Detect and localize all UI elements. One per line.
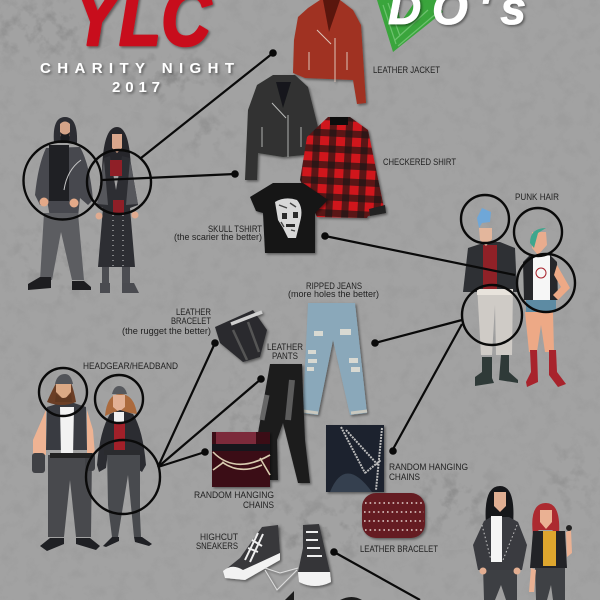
label: ripped jeans: RIPPED JEANS (306, 281, 362, 291)
subtitle: charity night: CHARITY NIGHT (40, 60, 234, 77)
item: black leather jacket (245, 75, 318, 180)
connector end dots (201, 49, 397, 556)
item: red leather jacket (293, 0, 366, 104)
item: jeans with chain (326, 425, 384, 492)
label: skull tshirt: SKULL TSHIRT (208, 224, 262, 234)
subtitle: year: 2017 (112, 79, 160, 96)
label: skull tshirt note: (the scarier the better) (174, 232, 262, 242)
item: ripped jeans (302, 303, 367, 415)
label: leather bracelet line 1: LEATHER (176, 307, 211, 317)
item: skull t-shirt (250, 183, 328, 253)
highlight circles (24, 142, 575, 514)
item: highcut sneakers (223, 524, 331, 590)
label: random hanging chains right line 1: RANDOM HANGING (389, 462, 468, 472)
figure: biker man (32, 374, 100, 551)
label: leather bracelet bottom: LEATHER BRACELET (360, 544, 438, 554)
connector lines (102, 53, 515, 600)
label: headgear: HEADGEAR/HEADBAND (83, 361, 178, 371)
label: leather pants line 2: PANTS (272, 351, 298, 361)
label: highcut: HIGHCUT (200, 532, 238, 542)
item: bottom cropped shapes (285, 591, 362, 600)
item: studded red bracelet (362, 493, 425, 538)
label: punk hair: PUNK HAIR (515, 192, 559, 202)
item: leather pants (258, 364, 310, 483)
icon: green check mark (377, 0, 443, 52)
label: ripped jeans note: (more holes the better) (288, 289, 379, 299)
figure: punk woman (523, 228, 570, 387)
figure: punk man (463, 208, 518, 386)
item: red hanging chains (212, 432, 270, 487)
label: checkered shirt: CHECKERED SHIRT (383, 157, 456, 167)
item: leather bracelet black (215, 310, 267, 362)
figure: long-haired man (28, 117, 93, 290)
figure: long-haired woman (96, 127, 139, 293)
figure: biker woman (97, 386, 152, 547)
label: leather jacket: LEATHER JACKET (373, 65, 440, 75)
label: random hanging chains left line 1: RANDOM HANGING (194, 490, 274, 500)
item: checkered shirt (300, 117, 386, 218)
label: leather bracelet note: (the rugget the better) (122, 326, 211, 336)
figure: bottom woman (529, 503, 572, 600)
figure: bottom man (473, 486, 527, 600)
label: leather bracelet line 2: BRACELET (171, 316, 211, 326)
label: sneakers: SNEAKERS (196, 541, 238, 551)
label: random hanging chains right line 2: CHAINS (389, 472, 420, 482)
label: random hanging chains left line 2: CHAINS (243, 500, 274, 510)
label: leather pants line 1: LEATHER (267, 342, 303, 352)
